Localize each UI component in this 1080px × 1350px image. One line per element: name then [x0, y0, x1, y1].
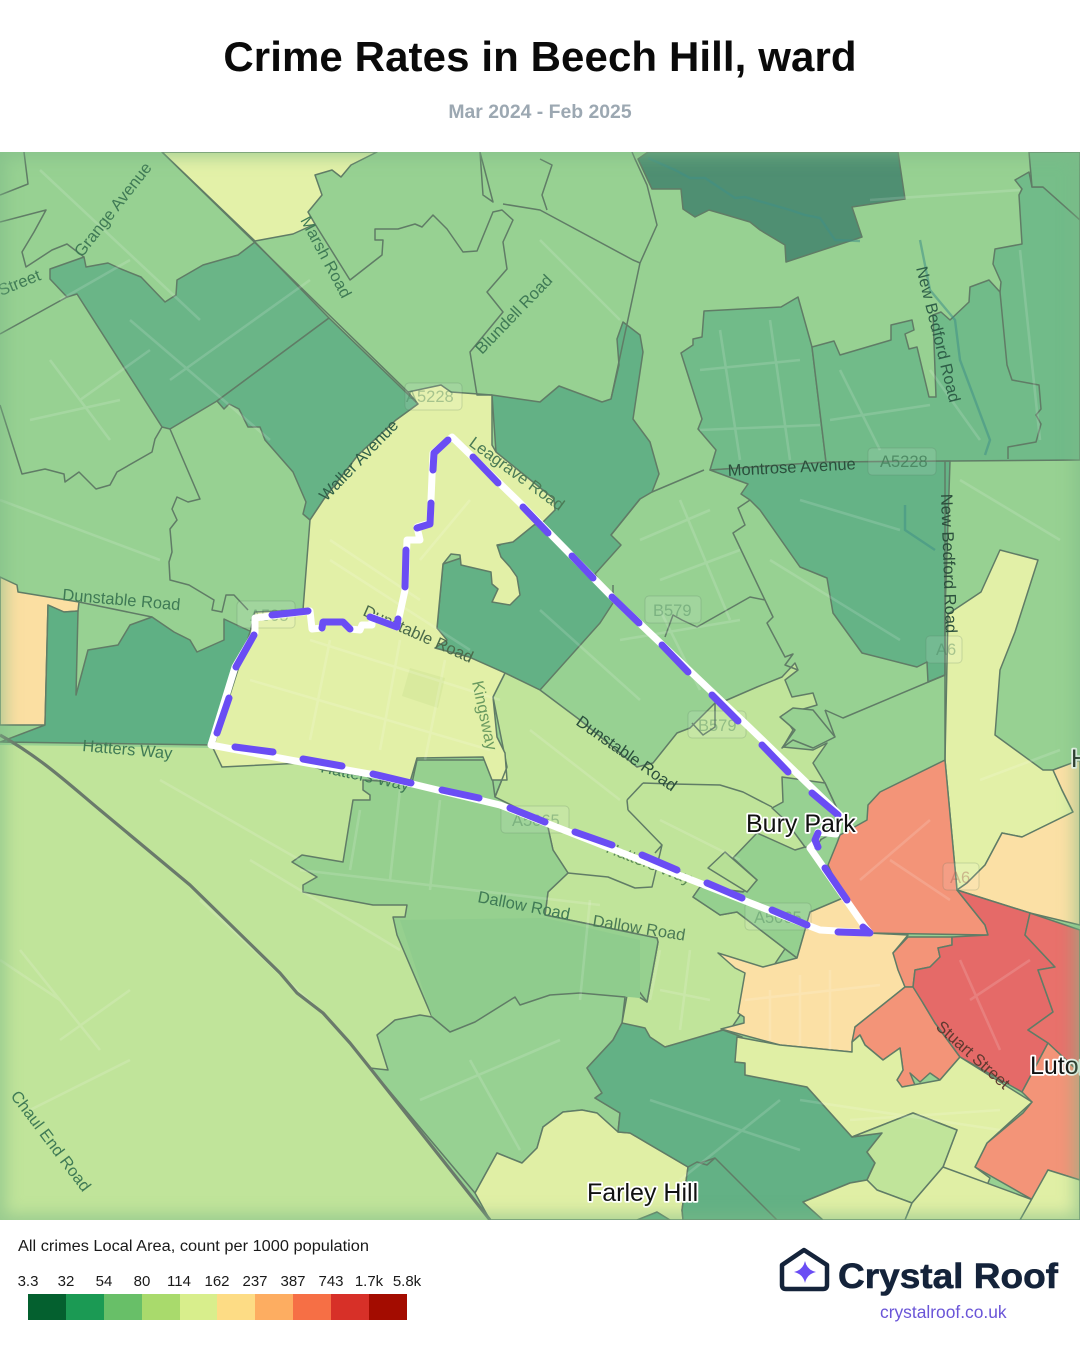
legend values: 114: [167, 1273, 191, 1290]
road labels: A6: [950, 869, 970, 887]
road labels: New Bedford Road: [937, 494, 960, 633]
road shields: [237, 383, 979, 930]
road labels: Kingsway: [468, 679, 501, 753]
legend values: 237: [242, 1273, 268, 1290]
road labels: [0, 159, 1014, 1195]
road labels: Chaul End Road: [7, 1088, 94, 1195]
brand name: Crystal Roof: [838, 1257, 1058, 1296]
road labels: Waller Avenue: [316, 416, 402, 505]
legend title: All crimes Local Area, count per 1000 population: [18, 1238, 369, 1255]
road labels: Grange Avenue: [71, 159, 156, 260]
legend values: 162: [204, 1273, 230, 1290]
ward boundary: purple dashes: [217, 440, 870, 933]
road labels: Dallow Road: [476, 888, 571, 924]
river: [648, 158, 990, 550]
map regions: [0, 152, 1080, 1220]
road labels: Dunstable Road: [360, 602, 476, 667]
road labels: A505: [250, 607, 289, 625]
road labels: A6: [936, 641, 956, 659]
ward fill: [213, 385, 555, 782]
road labels: Marsh Road: [296, 213, 355, 301]
railway line: [0, 735, 490, 1220]
road labels: Dunstable Road: [62, 586, 181, 614]
ward boundary: white outline: [211, 437, 870, 933]
legend: [18, 1238, 422, 1320]
legend values: 5.8k: [393, 1273, 422, 1290]
road labels: A5228: [880, 453, 928, 471]
legend values: 387: [280, 1273, 306, 1290]
road labels: Hatters Way: [604, 839, 695, 888]
legend values: [18, 1273, 422, 1290]
choropleth map: [0, 152, 1080, 1220]
place labels: Bury Park: [746, 810, 856, 838]
road labels: A5065: [512, 812, 560, 830]
legend values: 32: [58, 1273, 74, 1290]
road labels: B579: [698, 717, 737, 735]
road labels: B579: [653, 602, 692, 620]
road labels: Blundell Road: [472, 271, 556, 358]
icon: house with star: [782, 1250, 827, 1289]
map edge fade: [0, 152, 1080, 1220]
subtitle: date range: Mar 2024 - Feb 2025: [448, 101, 632, 123]
road labels: Leagrave Road: [466, 434, 568, 515]
legend colour scale: [28, 1294, 407, 1320]
road labels: Hatters Way: [82, 737, 174, 763]
legend values: 3.3: [18, 1273, 38, 1290]
road labels: Montrose Avenue: [727, 455, 856, 480]
road labels: Hatters Way: [319, 758, 412, 795]
legend values: 743: [318, 1273, 344, 1290]
road labels: Dallow Road: [591, 912, 687, 945]
legend values: 1.7k: [355, 1273, 384, 1290]
street network: [0, 170, 1060, 1180]
place labels: Farley Hill: [587, 1179, 698, 1207]
title: Crime Rates in Beech Hill, ward: [223, 33, 857, 80]
road labels: A5065: [754, 909, 802, 927]
road labels: New Bedford Road: [912, 265, 963, 404]
legend values: 80: [134, 1273, 150, 1290]
legend values: 54: [96, 1273, 112, 1290]
brand block: [780, 1248, 1058, 1322]
place labels: [587, 745, 1080, 1207]
road labels: Stuart Street: [932, 1018, 1014, 1093]
boundary lines: [0, 152, 657, 617]
road labels: Dunstable Road: [573, 713, 680, 795]
road labels: A5228: [406, 388, 454, 406]
website: crystalroof.co.uk: [880, 1302, 1007, 1322]
